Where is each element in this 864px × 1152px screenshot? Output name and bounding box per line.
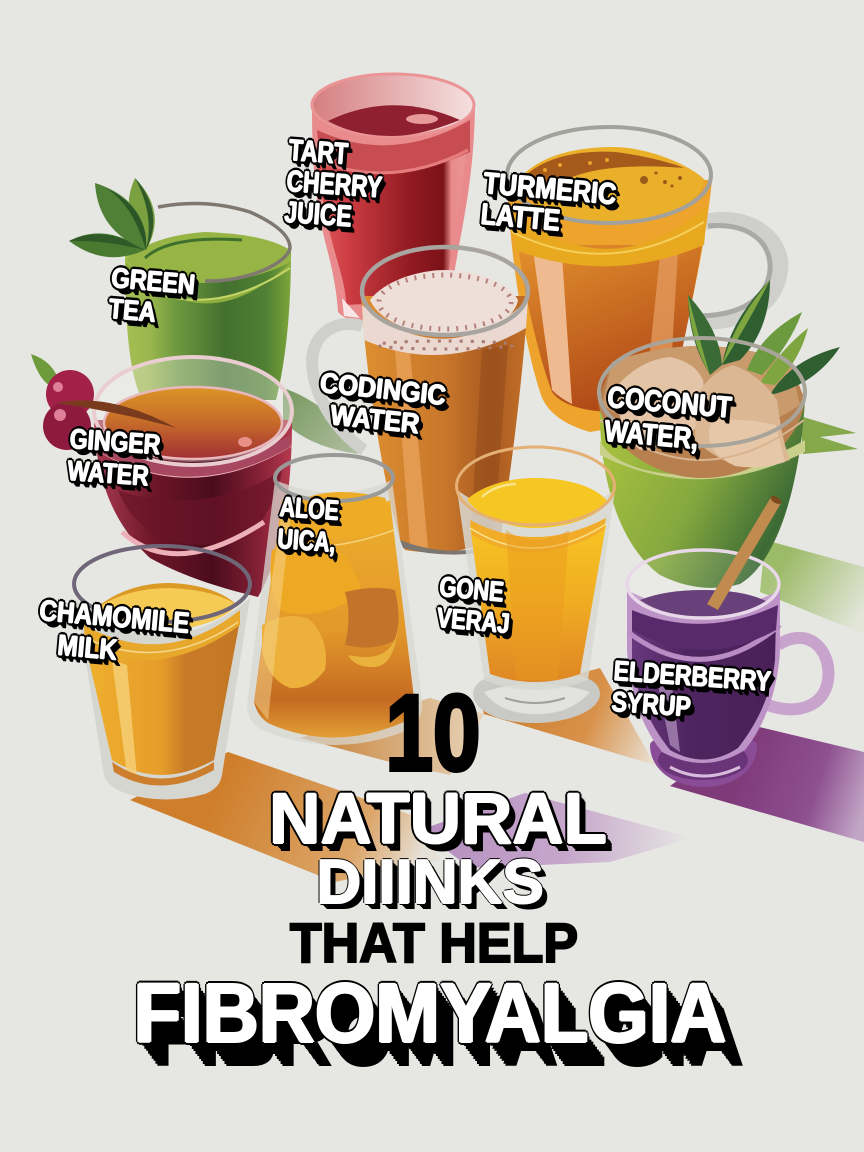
icon: berries	[31, 354, 176, 450]
label: chamomile milk: CHAMOMILE	[38, 595, 191, 640]
label: tart cherry juice: CHERRY	[286, 165, 383, 205]
label: chamomile milk	[38, 595, 194, 667]
drink: elderberry syrup	[627, 494, 828, 787]
label: ginger water: GINGER	[69, 423, 161, 460]
title line: natural: NATURAL	[269, 780, 607, 859]
icon: palm leaves	[688, 280, 840, 395]
drink: gone veraj	[456, 447, 615, 723]
label: elderberry syrup	[610, 655, 776, 722]
title line: drinks: DIIINKS	[316, 848, 544, 917]
label: tart cherry juice: JUICE	[283, 196, 353, 233]
drink: aloe vera	[247, 455, 422, 745]
label: gone veraj: VERAJ	[436, 602, 511, 639]
label: ginger water: WATER	[67, 455, 150, 492]
label: coconut water: COCONUT	[606, 381, 733, 425]
label: codingic water	[318, 367, 450, 440]
label: turmeric latte: LATTE	[480, 198, 561, 238]
icon: tea leaves	[69, 178, 155, 257]
background cast shadows	[130, 388, 864, 882]
label: ginger water	[66, 423, 164, 492]
label: aloe uica	[276, 491, 342, 562]
label: green tea: TEA	[108, 293, 157, 328]
drink: codingic water	[312, 247, 528, 555]
drink: tart cherry juice	[312, 74, 475, 322]
drink: ginger water	[31, 354, 292, 597]
label: aloe uica: ALOE	[279, 491, 340, 526]
drink: chamomile milk	[74, 546, 250, 800]
title	[134, 672, 743, 1067]
label: elderberry syrup: ELDERBERRY	[613, 655, 772, 697]
label: codingic water: CODINGIC	[319, 367, 447, 411]
label: green tea	[107, 262, 199, 328]
label: gone veraj	[436, 571, 513, 640]
title line: that help: THAT HELP	[290, 911, 578, 974]
title line: 10: 10	[386, 672, 480, 793]
label: green tea: GREEN	[110, 262, 196, 300]
label: tart cherry juice	[282, 134, 386, 233]
label: chamomile milk: MILK	[56, 630, 118, 667]
title line: fibromyalgia: FIBROMYALGIA	[134, 966, 726, 1060]
drink: coconut water	[598, 280, 858, 588]
icon: cinnamon stick	[707, 494, 783, 610]
label: turmeric latte	[479, 167, 620, 238]
label: codingic water: WATER	[329, 399, 421, 439]
label: aloe uica: UICA,	[277, 523, 337, 558]
label: gone veraj: GONE	[438, 571, 505, 607]
drink: green tea	[69, 178, 291, 400]
icon: palm fringe	[800, 416, 858, 454]
label: elderberry syrup: SYRUP	[611, 686, 692, 722]
label: tart cherry juice: TART	[288, 134, 349, 171]
label: coconut water: WATER,	[603, 415, 700, 456]
label: coconut water	[603, 381, 736, 460]
label: turmeric latte: TURMERIC	[482, 167, 618, 211]
drink: turmeric latte	[507, 127, 780, 432]
